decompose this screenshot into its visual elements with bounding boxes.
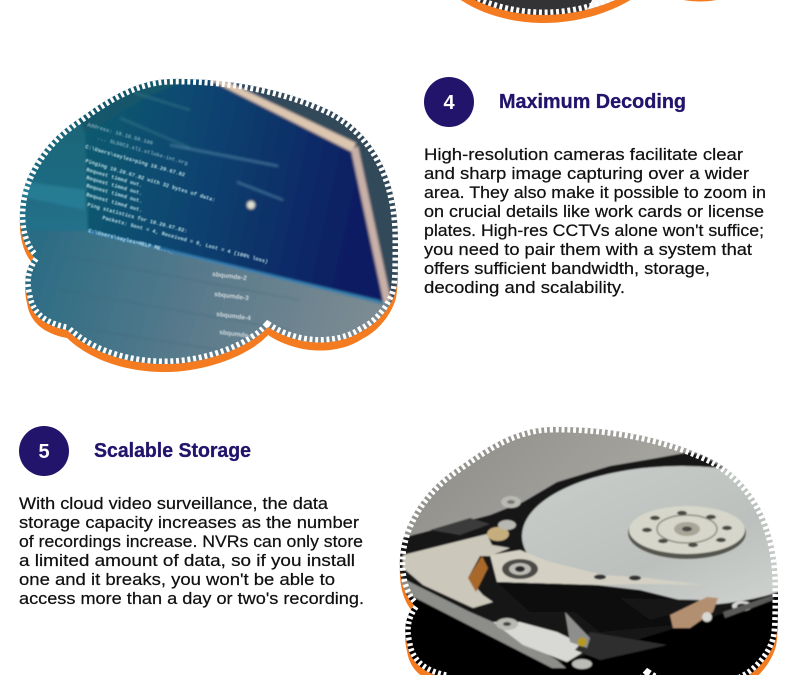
body text: maximum decoding [424, 145, 766, 297]
perforated white edge [20, 79, 398, 364]
body text: scalable storage: storage capacity increases as the number [19, 513, 359, 532]
image fragment: previous section photo cropped at top [460, 0, 716, 23]
voice coil bearing [502, 559, 538, 579]
terminal text: Ping statistics for 10.20.67.82: [86, 202, 188, 235]
terminal text: Request timed out. [85, 192, 143, 214]
orange blob shadow [20, 218, 398, 372]
heading: maximum decoding: Maximum Decoding [499, 90, 686, 113]
body text: maximum decoding: you need to pair them with a system that [424, 240, 752, 259]
terminal text: sbqumde-4 [216, 311, 251, 322]
terminal text: sbqumde-2 [212, 271, 247, 282]
body text: scalable storage: access more than a day or two's recording. [19, 589, 364, 608]
screws [501, 496, 521, 508]
photo: command prompt on monitor [20, 78, 398, 364]
terminal text: C:\Users\sayles>HELP ME..._ [88, 228, 174, 255]
number badge 4: 4 [443, 92, 455, 114]
terminal text: Request timed out. [85, 175, 143, 197]
body text: scalable storage: one and it breaks, you won't be able to [19, 570, 335, 589]
panel: maximum decoding photo [20, 78, 398, 372]
body text: maximum decoding: offers sufficient bandwidth, storage, [424, 259, 710, 278]
body text: maximum decoding: plates. High-res CCTVs alone won't suffice; [424, 221, 764, 240]
body text: maximum decoding: area. They also make it possible to zoom in [424, 183, 766, 202]
body text: scalable storage: a limited amount of data, so if you install [19, 551, 355, 570]
panel: step 4 [424, 77, 766, 297]
spindle hub [627, 528, 747, 560]
terminal text [84, 122, 269, 340]
orange blob shadow [400, 566, 778, 675]
terminal text: Request timed out. [85, 167, 143, 189]
panel: scalable storage photo [400, 426, 778, 675]
terminal text: Packets: Sent = 4, Received = 0, Lost = 4 (100% loss) [101, 215, 269, 265]
terminal text: Address: 10.10.50.100 [86, 122, 153, 147]
number badge 4 [424, 77, 474, 127]
terminal text: Request timed out. [85, 183, 143, 205]
terminal text: sbqumde-3 [214, 291, 249, 302]
body text: scalable storage: With cloud video surveillance, the data [19, 494, 329, 513]
arm [403, 534, 510, 608]
body text: scalable storage [19, 494, 364, 608]
number badge 5 [19, 426, 69, 476]
terminal text: Pinging 10.20.67.82 with 32 bytes of data: [84, 158, 216, 204]
copper flex [670, 597, 718, 628]
body text: maximum decoding: and sharp image capturing over a wider [424, 164, 749, 183]
terminal text: ... SLS0C3.sl1.stluke-int.org [96, 135, 188, 167]
terminal text: C:\Users\sayles>ping 10.20.67.82 [84, 144, 186, 178]
perforated white edge [400, 427, 778, 675]
panel: step 5 [19, 426, 364, 608]
body text: scalable storage: of recordings increase. NVRs can only store [19, 532, 363, 551]
number badge 5: 5 [38, 441, 50, 463]
heading: scalable storage: Scalable Storage [94, 439, 251, 462]
body text: maximum decoding: on crucial details like work cards or license [424, 202, 764, 221]
photo: open hard disk drive [400, 426, 778, 675]
body text: maximum decoding: decoding and scalability. [424, 278, 625, 297]
terminal text: sbqumde-5 [219, 329, 254, 340]
body text: maximum decoding: High-resolution cameras facilitate clear [424, 145, 743, 164]
